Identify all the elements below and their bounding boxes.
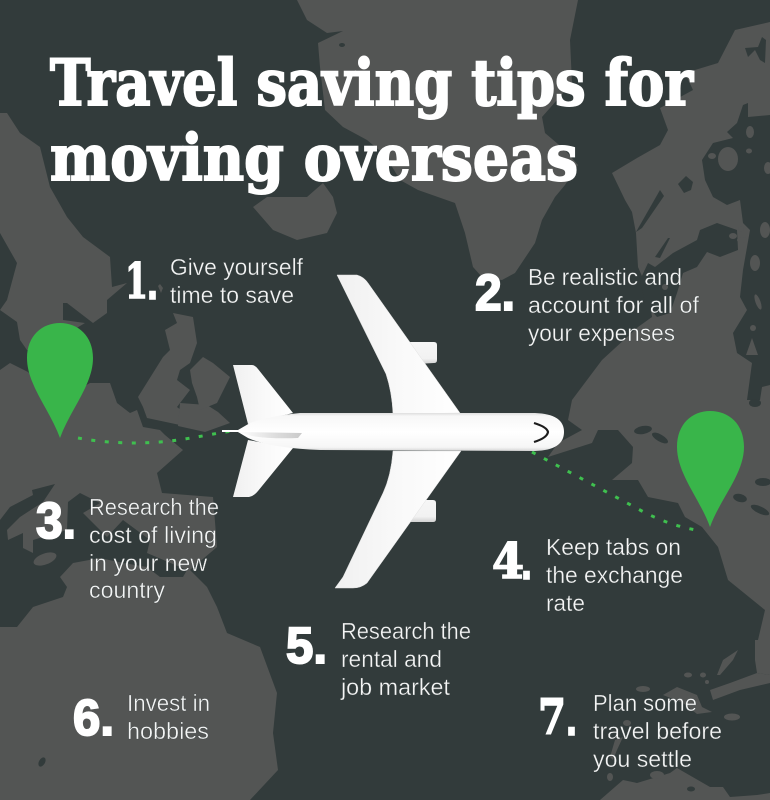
cockpit windshield: [534, 423, 548, 442]
tip 4: rate: [546, 590, 585, 616]
tip 6: hobbies: [127, 718, 209, 744]
icon: left location pin: [27, 323, 93, 438]
tip 2: account for all of: [528, 292, 700, 318]
lower engine: [405, 500, 436, 522]
tip 3: [36, 492, 219, 603]
tip 7: Plan some: [593, 690, 697, 716]
tip 4: [492, 532, 683, 616]
tip 3: country: [89, 577, 165, 603]
tip 5: 5.: [286, 617, 327, 674]
flight path: left dotted line: [78, 431, 232, 443]
title: moving overseas: [50, 121, 578, 196]
tip 3: 3.: [36, 492, 76, 549]
tip 5: Research the: [341, 618, 471, 644]
fuselage: [222, 413, 564, 451]
tip 4: .: [521, 533, 532, 590]
title: [50, 46, 694, 196]
upper engine: [405, 342, 437, 364]
flight path: right dotted line: [532, 452, 696, 530]
tip 3: cost of living: [89, 522, 217, 548]
tip 1: .: [147, 253, 158, 310]
icon: right location pin: [677, 411, 744, 527]
tip 4: Keep tabs on: [546, 534, 681, 560]
tip 4: 4: [492, 532, 524, 590]
tip 5: [286, 617, 471, 700]
upper wing: [337, 275, 460, 414]
tip 6: [73, 689, 210, 746]
tip 7: 7: [538, 688, 566, 746]
tip 7: [538, 688, 722, 772]
tip 2: your expenses: [528, 320, 675, 346]
tip 4: the exchange: [546, 562, 683, 588]
tip 1: time to save: [170, 282, 294, 308]
tip 3: in your new: [89, 550, 207, 576]
tip 6: Invest in: [127, 690, 210, 716]
tip 2: [475, 264, 700, 346]
tip 5: job market: [340, 674, 451, 700]
upper tailplane: [233, 365, 293, 424]
tip 1: [125, 252, 304, 310]
airplane: [222, 275, 564, 588]
tip 6: 6.: [73, 689, 114, 746]
lower tailplane: [233, 440, 293, 497]
tip 1: 1: [125, 252, 148, 310]
tip 3: Research the: [89, 494, 219, 520]
map islands inside seas: [32, 126, 770, 568]
tip 5: rental and: [341, 646, 442, 672]
tip 7: travel before: [593, 718, 722, 744]
tip 7: .: [566, 689, 577, 746]
tip 1: Give yourself: [170, 254, 304, 280]
tip 2: Be realistic and: [528, 264, 682, 290]
tip 2: 2.: [475, 264, 515, 321]
lower wing: [335, 451, 461, 588]
tail shadow: [238, 432, 302, 438]
tip 7: you settle: [593, 746, 692, 772]
